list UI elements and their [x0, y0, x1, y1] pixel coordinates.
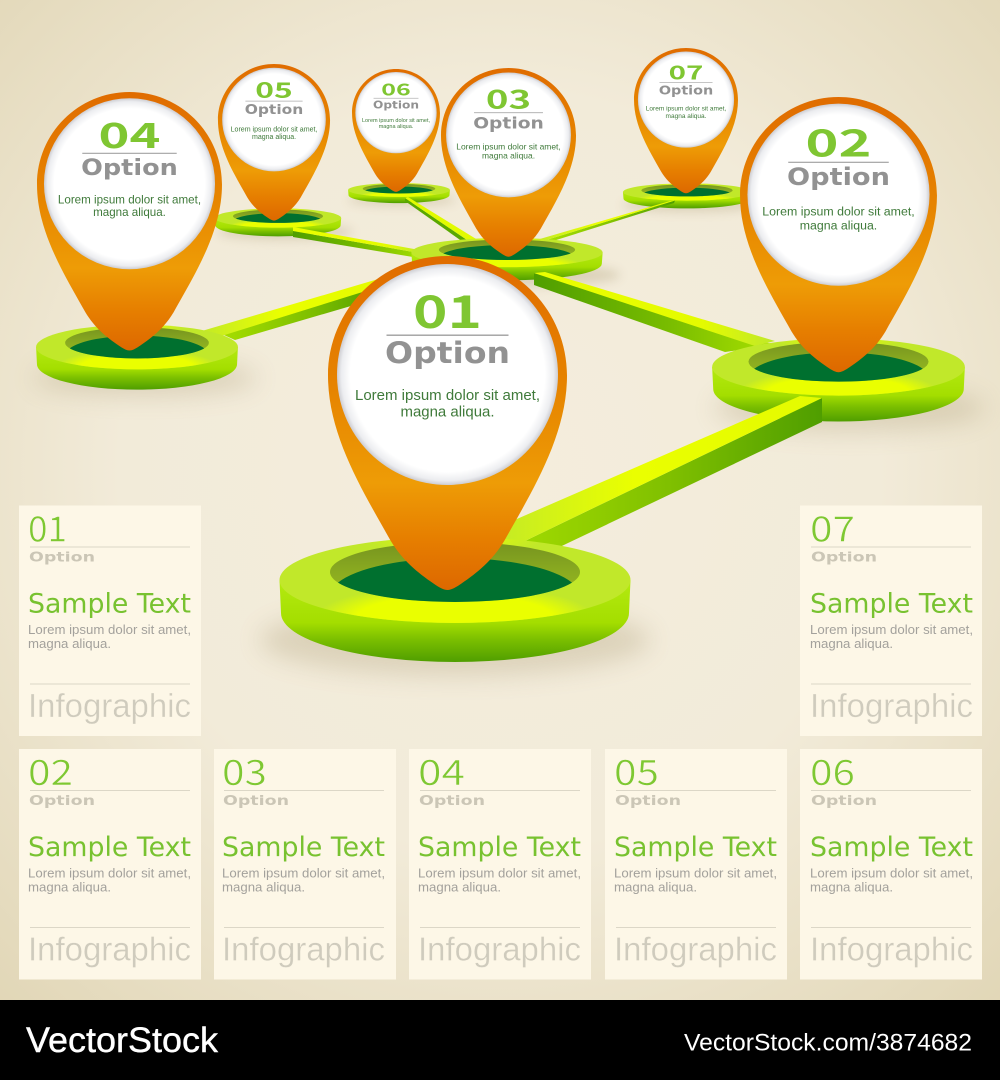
card 01: 01: [28, 502, 67, 552]
pin 01: Option: [385, 336, 510, 370]
pin 01: magna aliqua.: [400, 404, 494, 420]
card 06: 06: [810, 745, 855, 796]
pin 04: 04: [99, 109, 160, 159]
card 04: [409, 745, 591, 980]
card 03: Infographic: [222, 930, 385, 968]
card 05: Infographic: [614, 930, 777, 968]
card 01: Infographic: [28, 687, 191, 724]
pin 02: Option: [787, 163, 890, 191]
card 03: 03: [222, 745, 267, 796]
footer bar: [0, 1000, 1000, 1080]
ring 01 base: [280, 537, 630, 662]
card 07: Sample Text: [810, 588, 973, 620]
pin 06: 06: [381, 77, 411, 101]
pin 03: magna aliqua.: [482, 151, 535, 161]
connector 05 to hub: [293, 227, 425, 259]
pin 03: 03: [486, 81, 531, 117]
pin 06: Lorem ipsum dolor sit amet,: [362, 118, 430, 124]
card 06: Option: [811, 794, 877, 809]
connector 07 to hub: [533, 200, 675, 241]
pin 07: [634, 48, 738, 193]
card 07: Infographic: [810, 687, 973, 724]
pin 05: Option: [245, 102, 303, 118]
connector 06 to hub: [405, 197, 481, 242]
pin 06: Option: [373, 98, 419, 111]
card 04: 04: [418, 745, 465, 796]
card 03: Lorem ipsum dolor sit amet,: [222, 866, 385, 880]
card 05: Option: [615, 794, 681, 809]
card 04: Sample Text: [418, 832, 581, 863]
card 02: Option: [29, 794, 95, 809]
card 05: [605, 745, 787, 980]
connector 04 to hub: [195, 277, 385, 340]
card 03: [214, 745, 396, 980]
pin 02: magna aliqua.: [800, 218, 877, 232]
card 04: Infographic: [418, 930, 581, 968]
pin 01: Lorem ipsum dolor sit amet,: [355, 387, 540, 404]
pin 04: [37, 92, 222, 351]
card 07: magna aliqua.: [810, 636, 893, 651]
pin 06: [352, 69, 440, 192]
connector hub to 02: [534, 272, 775, 352]
pin 01: [328, 256, 567, 590]
card 02: Infographic: [28, 930, 191, 968]
pin 02: [740, 97, 937, 372]
pin 07: Lorem ipsum dolor sit amet,: [646, 106, 726, 113]
pin 07: magna aliqua.: [666, 113, 707, 120]
pin 07: 07: [669, 56, 703, 85]
card 07: 07: [810, 502, 855, 552]
pin 05: 05: [255, 75, 293, 105]
pin 05: magna aliqua.: [252, 134, 296, 141]
ring shadows: [33, 194, 985, 676]
card 04: magna aliqua.: [418, 880, 501, 894]
pin 03: Option: [473, 113, 544, 132]
card 01: magna aliqua.: [28, 636, 111, 651]
card 05: Sample Text: [614, 832, 777, 863]
ring 04 base: [36, 325, 238, 390]
card 02: Lorem ipsum dolor sit amet,: [28, 866, 191, 880]
pin 06: magna aliqua.: [379, 124, 414, 130]
pin 05: Lorem ipsum dolor sit amet,: [231, 126, 317, 133]
ring 07 base: [623, 183, 751, 208]
card 06: Lorem ipsum dolor sit amet,: [810, 866, 973, 880]
footer url: VectorStock.com/3874682: [684, 1030, 972, 1056]
card 06: Sample Text: [810, 832, 973, 863]
pin 07: Option: [659, 83, 713, 98]
ring 06 base: [348, 183, 450, 203]
card 05: Lorem ipsum dolor sit amet,: [614, 866, 777, 880]
card 01: Option: [29, 550, 95, 566]
footer logo: VectorStock: [26, 1021, 219, 1060]
card 07: [800, 502, 982, 736]
card 03: Option: [223, 794, 289, 809]
card 02: [19, 745, 201, 980]
pin 02: Lorem ipsum dolor sit amet,: [762, 205, 915, 219]
pin 02: 02: [806, 113, 871, 167]
card 05: 05: [614, 745, 659, 796]
ring 02 base: [712, 338, 965, 422]
pin 05: [218, 64, 330, 221]
pin 04: Option: [81, 155, 178, 181]
pin 01: 01: [413, 276, 482, 341]
card 07: Option: [811, 550, 877, 566]
ring 05 base: [215, 208, 341, 236]
card 02: 02: [28, 745, 73, 796]
pin 03: Lorem ipsum dolor sit amet,: [456, 141, 561, 151]
card 06: [800, 745, 982, 980]
card 01: [19, 502, 201, 736]
card 04: Lorem ipsum dolor sit amet,: [418, 866, 581, 880]
pin 04: magna aliqua.: [93, 206, 166, 219]
card 06: Infographic: [810, 930, 973, 968]
card 02: Sample Text: [28, 832, 191, 863]
pin 04: Lorem ipsum dolor sit amet,: [58, 193, 201, 206]
card 04: Option: [419, 794, 485, 809]
card 06: magna aliqua.: [810, 880, 893, 894]
card 03: magna aliqua.: [222, 880, 305, 894]
card 02: magna aliqua.: [28, 880, 111, 894]
connector 02 to 01: [480, 396, 822, 576]
card 07: Lorem ipsum dolor sit amet,: [810, 622, 973, 637]
card 01: Sample Text: [28, 588, 191, 620]
card 03: Sample Text: [222, 832, 385, 863]
ring hub base: [411, 238, 603, 280]
pin 03: [441, 68, 576, 257]
card 05: magna aliqua.: [614, 880, 697, 894]
card 01: Lorem ipsum dolor sit amet,: [28, 622, 191, 637]
